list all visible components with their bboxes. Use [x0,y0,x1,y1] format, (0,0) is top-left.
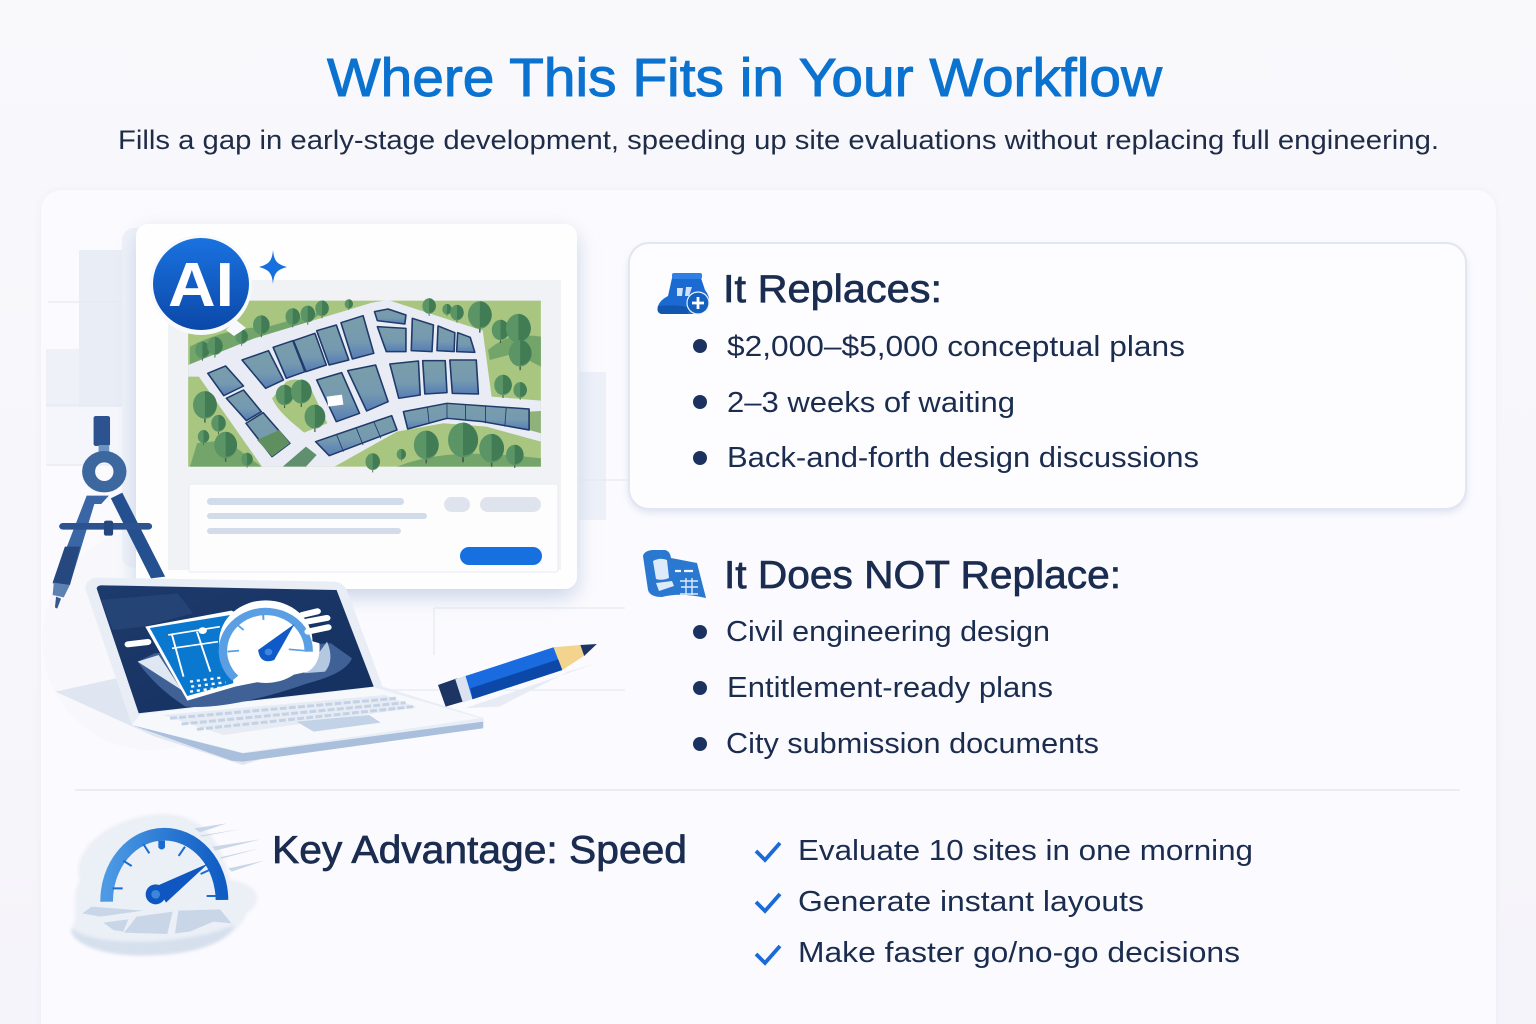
does-not-replace list: Entitlement-ready plans [727,672,1053,704]
panel: main card [41,190,1496,1024]
replaces list: Back-and-forth design discussions [727,442,1199,474]
replaces list [693,331,1199,474]
does-not-replace list: City submission documents [726,728,1099,760]
does-not-replace list [693,616,1099,760]
icon: drafting compass [53,416,165,609]
subtitle: Fills a gap in early-stage development, speeding up site evaluations without replacing full engineering. [118,125,1439,155]
panel: it replaces [629,243,1466,512]
illustration: site planning scene [42,224,640,765]
title: Where This Fits in Your Workflow [327,48,1163,108]
check item 3: Make faster go/no-go decisions [798,937,1240,969]
key advantage checklist [756,835,1253,969]
heading: it replaces: It Replaces: [723,268,942,311]
site plan map [188,298,541,472]
heading: key advantage: Key Advantage: Speed [272,829,687,872]
replaces list: $2,000–$5,000 conceptual plans [727,331,1185,363]
replaces list: 2–3 weeks of waiting [727,387,1015,419]
card: site plan window [122,224,577,597]
icon: pencil [438,644,597,708]
background blueprint blocks [42,250,640,750]
details panel [189,484,558,572]
check item 2: Generate instant layouts [798,886,1144,918]
icon: replaces [658,273,709,314]
heading: does not replace: It Does NOT Replace: [724,554,1121,597]
section: it does not replace [643,550,1121,760]
check item 1: Evaluate 10 sites in one morning [798,835,1253,867]
icon: speedometer [71,814,264,955]
AI badge: AI [168,251,234,320]
does-not-replace list: Civil engineering design [726,616,1050,648]
AI badge [150,235,252,336]
icon: document [643,550,706,598]
icon: sparkle [259,250,287,284]
laptop [55,578,484,765]
